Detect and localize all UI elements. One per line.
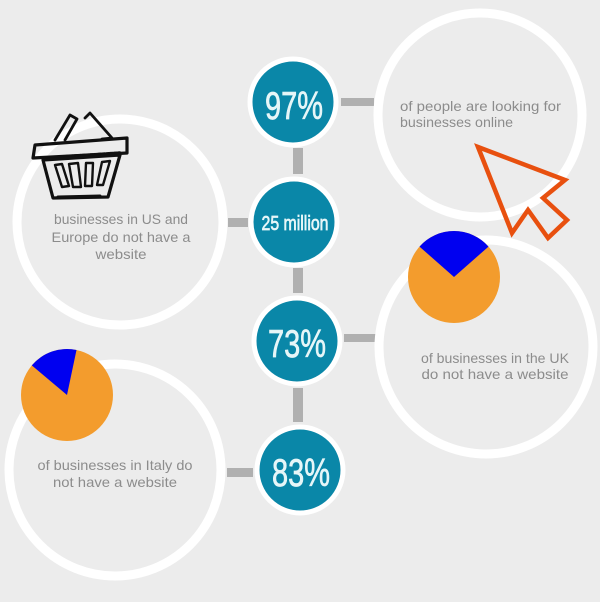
panel: top right circle	[378, 13, 582, 217]
text: businesses in the UK: do not have a website	[422, 366, 569, 382]
icon: shopping basket	[33, 113, 127, 198]
node: 97%: 97%	[265, 85, 323, 128]
text: businesses in Italy: of businesses in Italy do	[38, 457, 193, 473]
text: businesses in US and Europe: Europe do not have a	[52, 229, 191, 245]
panel: bottom left circle	[9, 364, 221, 576]
pie chart: UK	[408, 231, 500, 323]
panel: right circle	[379, 240, 593, 454]
icon: cursor arrow	[478, 147, 567, 238]
node: 25 million: 25 million	[262, 213, 328, 235]
pie chart: Italy	[21, 349, 113, 441]
node: 73%: 73%	[268, 323, 326, 366]
text: people looking online: of people are looking for	[400, 98, 561, 114]
text: businesses in US and Europe: businesses in US and	[54, 211, 188, 227]
text: businesses in Italy: not have a website	[53, 474, 177, 490]
panel: left circle	[17, 119, 223, 325]
text: businesses in US and Europe: website	[94, 246, 147, 262]
node: 97%	[250, 59, 336, 145]
text: people looking online: businesses online	[400, 114, 513, 130]
node: 83%: 83%	[272, 452, 330, 495]
node: 73%	[254, 298, 340, 384]
node: 25 million	[251, 179, 337, 265]
node: 83%	[257, 427, 343, 513]
text: businesses in the UK: of businesses in the UK	[421, 350, 570, 366]
